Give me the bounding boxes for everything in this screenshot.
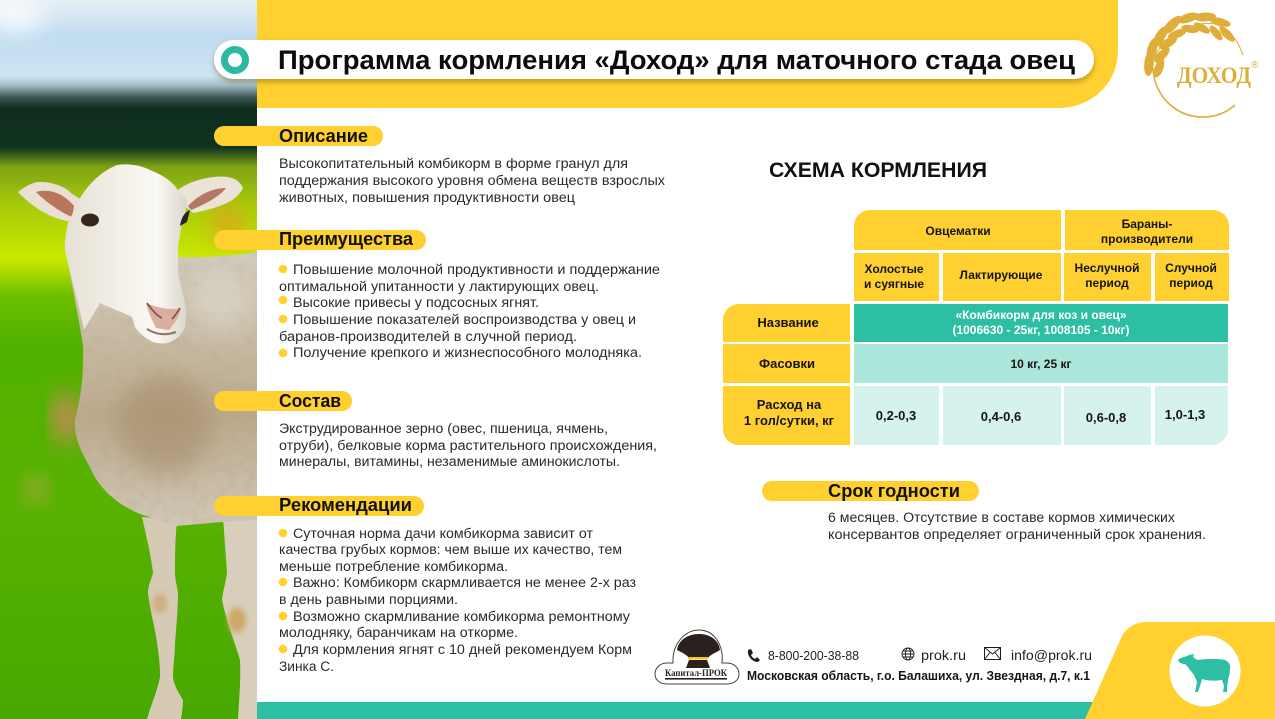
- address: Московская область, г.о. Балашиха, ул. Звездная, д.7, к.1: [747, 668, 1090, 683]
- heading pill: shelf life: [762, 481, 979, 501]
- sub-header: dry and pregnant: и суягные: [864, 277, 924, 291]
- row label: consumption: Расход на: [757, 397, 822, 412]
- composition text: минералы, витамины, незаменимые аминокислоты.: [279, 454, 620, 469]
- composition text: [279, 421, 657, 469]
- advantages list: Повышение молочной продуктивности и поддержание: [293, 262, 660, 277]
- background photo: blurred meadow: [0, 0, 257, 719]
- composition text: отруби), белковые корма растительного происхождения,: [279, 438, 657, 453]
- sub-header: non-breeding period: Неслучной: [1075, 261, 1139, 275]
- heading pill: description: Описание: [279, 126, 368, 146]
- logo: Kapital-PROK sheaf: Капитал-ПРОК: [665, 668, 727, 678]
- logo: Доход wheat wreath: [1143, 10, 1259, 117]
- row label: packaging: Фасовки: [759, 356, 815, 371]
- advantages list: Получение крепкого и жизнеспособного молодняка.: [293, 345, 642, 360]
- sub-header: breeding period: Случной: [1165, 261, 1217, 275]
- recommendations list: Важно: Комбикорм скармливается не менее 2-х раз: [293, 575, 636, 590]
- row value: product name: [854, 304, 1228, 342]
- sub-header: dry and pregnant: [854, 253, 939, 301]
- icon: mail: [984, 648, 1000, 660]
- recommendations list: Возможно скармливание комбикорма ремонтному: [293, 609, 630, 624]
- advantages list: оптимальной упитанности у лактирующих овец.: [279, 279, 599, 294]
- composition text: Экструдированное зерно (овес, пшеница, ячмень,: [279, 421, 608, 436]
- sub-header: non-breeding period: [1064, 253, 1151, 301]
- heading pill: recommendations: [214, 495, 424, 516]
- sub-header: non-breeding period: период: [1085, 276, 1129, 290]
- section: description: [214, 126, 665, 205]
- value cell: 0,6-0,8: 0,6-0,8: [1086, 410, 1126, 425]
- photo: white sheep: [18, 164, 257, 719]
- advantages list: [279, 262, 660, 360]
- heading pill: advantages: Преимущества: [279, 229, 414, 249]
- heading pill: shelf life: Срок годности: [828, 481, 960, 501]
- heading pill: composition: Состав: [279, 391, 341, 411]
- value cell: 0,2-0,3: 0,2-0,3: [876, 408, 916, 423]
- logo: Доход wheat wreath: ДОХОД: [1177, 63, 1251, 88]
- sub-header: lactating: [943, 253, 1061, 301]
- row value: packaging: [854, 344, 1228, 383]
- heading pill: composition: [214, 391, 352, 411]
- logo: Доход wheat wreath: ®: [1251, 60, 1259, 71]
- heading pill: recommendations: Рекомендации: [279, 495, 412, 515]
- sub-header: dry and pregnant: Холостые: [864, 262, 924, 276]
- row value: packaging: 10 кг, 25 кг: [1011, 357, 1071, 371]
- title bar: [214, 40, 1094, 79]
- row label: name: Название: [757, 315, 819, 330]
- section: composition: [214, 391, 657, 469]
- icon: phone: [748, 649, 760, 662]
- top yellow header panel: [257, 0, 1118, 108]
- shelf life text: [828, 510, 1206, 542]
- value cell: 0,2-0,3: [854, 386, 939, 445]
- shelf life text: 6 месяцев. Отсутствие в составе кормов химических: [828, 510, 1175, 525]
- advantages list: Повышение показателей воспроизводства у овец и: [293, 312, 636, 327]
- table header: rams: Бараны-: [1122, 217, 1172, 231]
- heading pill: advantages: [214, 229, 426, 250]
- title text: Программа кормления «Доход» для маточного стада овец: [278, 45, 1075, 75]
- section: recommendations: [214, 495, 636, 674]
- advantages list: баранов-производителей в случной период.: [279, 329, 577, 344]
- row label: packaging: [723, 344, 850, 383]
- table header: ewes: Овцематки: [925, 224, 991, 238]
- table header: ewes: [854, 210, 1061, 250]
- icon: teal ring: [224, 50, 246, 70]
- description text: животных, повышения продуктивности овец: [279, 190, 575, 205]
- row label: consumption: 1 гол/сутки, кг: [744, 413, 835, 428]
- recommendations list: молодняку, баранчикам на откорме.: [279, 625, 518, 640]
- heading pill: description: [214, 126, 383, 146]
- section: advantages: [214, 229, 660, 360]
- recommendations list: Для кормления ягнят с 10 дней рекомендуем Корм: [293, 642, 632, 657]
- shelf life text: консервантов определяет ограниченный срок хранения.: [828, 527, 1206, 542]
- row label: name: [723, 304, 850, 342]
- logo: Kapital-PROK sheaf: [655, 630, 739, 684]
- value cell: 0,4-0,6: [943, 386, 1061, 445]
- advantages list: Высокие привесы у подсосных ягнят.: [293, 295, 539, 310]
- recommendations list: качества грубых кормов: чем выше их качество, тем: [279, 542, 622, 557]
- row label: consumption: [723, 386, 850, 445]
- phone number: 8-800-200-38-88: [768, 648, 859, 663]
- description text: [279, 156, 665, 205]
- contacts: [747, 647, 1092, 683]
- value cell: 1,0-1,3: [1155, 386, 1228, 445]
- section: shelf life: [762, 481, 1206, 542]
- sub-header: lactating: Лактирующие: [960, 268, 1043, 282]
- recommendations list: Зинка С.: [279, 659, 334, 674]
- white content panel: [257, 0, 1275, 719]
- value cell: 1,0-1,3: 1,0-1,3: [1165, 407, 1205, 422]
- description text: поддержания высокого уровня обмена веществ взрослых: [279, 173, 665, 188]
- icon: teal sheep: [1178, 654, 1230, 692]
- value cell: 0,6-0,8: [1064, 386, 1151, 445]
- heading: feeding scheme: СХЕМА КОРМЛЕНИЯ: [769, 159, 987, 182]
- table header: rams: [1065, 210, 1229, 250]
- feeding scheme table: [723, 210, 1229, 445]
- recommendations list: [279, 526, 636, 674]
- website: prok.ru: [921, 647, 966, 663]
- table header: rams: производители: [1101, 232, 1193, 246]
- row value: product name: «Комбикорм для коз и овец»: [955, 308, 1127, 322]
- white circle badge: [1170, 636, 1240, 706]
- recommendations list: Суточная норма дачи комбикорма зависит от: [293, 526, 593, 541]
- description text: Высокопитательный комбикорм в форме гранул для: [279, 156, 628, 171]
- icon: globe: [902, 648, 914, 660]
- recommendations list: меньше потребление комбикорма.: [279, 559, 508, 574]
- sub-header: breeding period: период: [1169, 276, 1213, 290]
- row value: product name: (1006630 - 25кг, 1008105 - 10кг): [952, 323, 1130, 337]
- value cell: 0,4-0,6: 0,4-0,6: [981, 409, 1021, 424]
- bottom teal band: [257, 702, 1097, 719]
- email: info@prok.ru: [1011, 647, 1092, 663]
- yellow corner panel: [1085, 622, 1275, 719]
- sub-header: breeding period: [1155, 253, 1229, 301]
- recommendations list: в день равными порциями.: [279, 592, 458, 607]
